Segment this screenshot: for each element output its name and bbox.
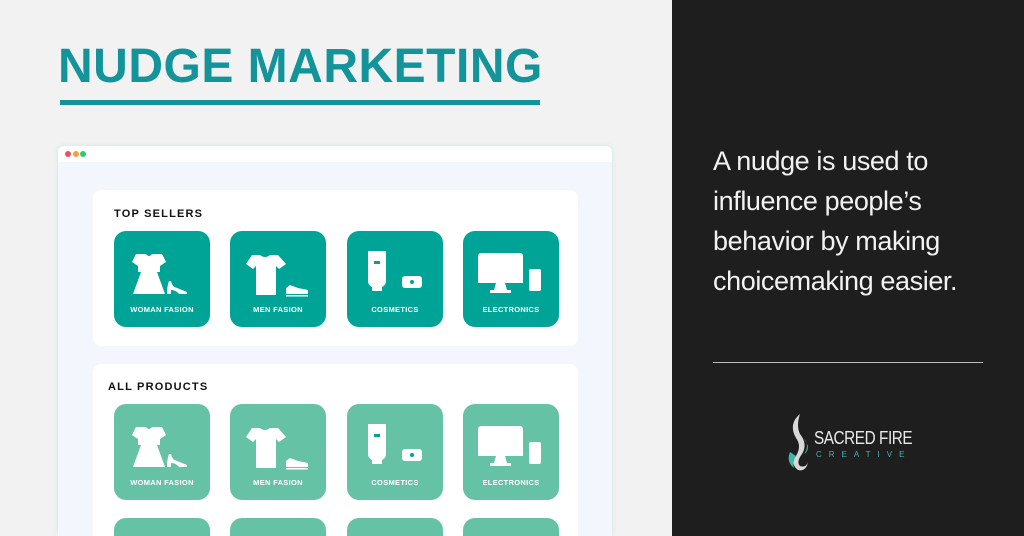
- tile: woman fashion: [114, 404, 210, 500]
- tile: electronics: [463, 231, 559, 327]
- tile: woman fashion: WOMAN FASION: [130, 478, 194, 487]
- panel: all products: [93, 364, 578, 536]
- text block: nudge definition: A nudge is used to: [713, 146, 928, 176]
- tile: electronics: [463, 404, 559, 500]
- text block: nudge definition: influence people’s: [713, 186, 921, 216]
- window top bar: [58, 146, 612, 162]
- heading: all products: ALL PRODUCTS: [108, 381, 208, 393]
- tile: cosmetics: COSMETICS: [371, 305, 419, 314]
- icon: flame: [788, 414, 808, 470]
- panel: dark sidebar: [672, 0, 1024, 536]
- title: NUDGE MARKETING: [58, 40, 543, 93]
- text block: nudge definition: [713, 146, 957, 296]
- browser window mockup: [58, 146, 612, 536]
- tile: men fashion: [230, 231, 326, 327]
- tile: woman fashion: [114, 231, 210, 327]
- logo wordmark: SACRED FIRE: [814, 428, 912, 448]
- tile: electronics: ELECTRONICS: [482, 478, 540, 487]
- tile: men fashion: MEN FASION: [253, 478, 303, 487]
- tile: men fashion: MEN FASION: [253, 305, 303, 314]
- tile: woman fashion: WOMAN FASION: [130, 305, 194, 314]
- third row tiles (partial): [114, 518, 559, 536]
- divider line: [713, 362, 983, 363]
- text block: nudge definition: behavior by making: [713, 226, 940, 256]
- panel: top sellers: [93, 190, 578, 346]
- title underline: [60, 100, 540, 105]
- text block: nudge definition: choicemaking easier.: [713, 266, 957, 296]
- tile: men fashion: [230, 404, 326, 500]
- tile: cosmetics: [347, 231, 443, 327]
- logo subtitle: CREATIVE: [816, 450, 911, 459]
- heading: top sellers: TOP SELLERS: [114, 208, 203, 220]
- logo: sacred fire creative: [788, 414, 912, 470]
- tile: electronics: ELECTRONICS: [482, 305, 540, 314]
- tile: cosmetics: COSMETICS: [371, 478, 419, 487]
- tile: cosmetics: [347, 404, 443, 500]
